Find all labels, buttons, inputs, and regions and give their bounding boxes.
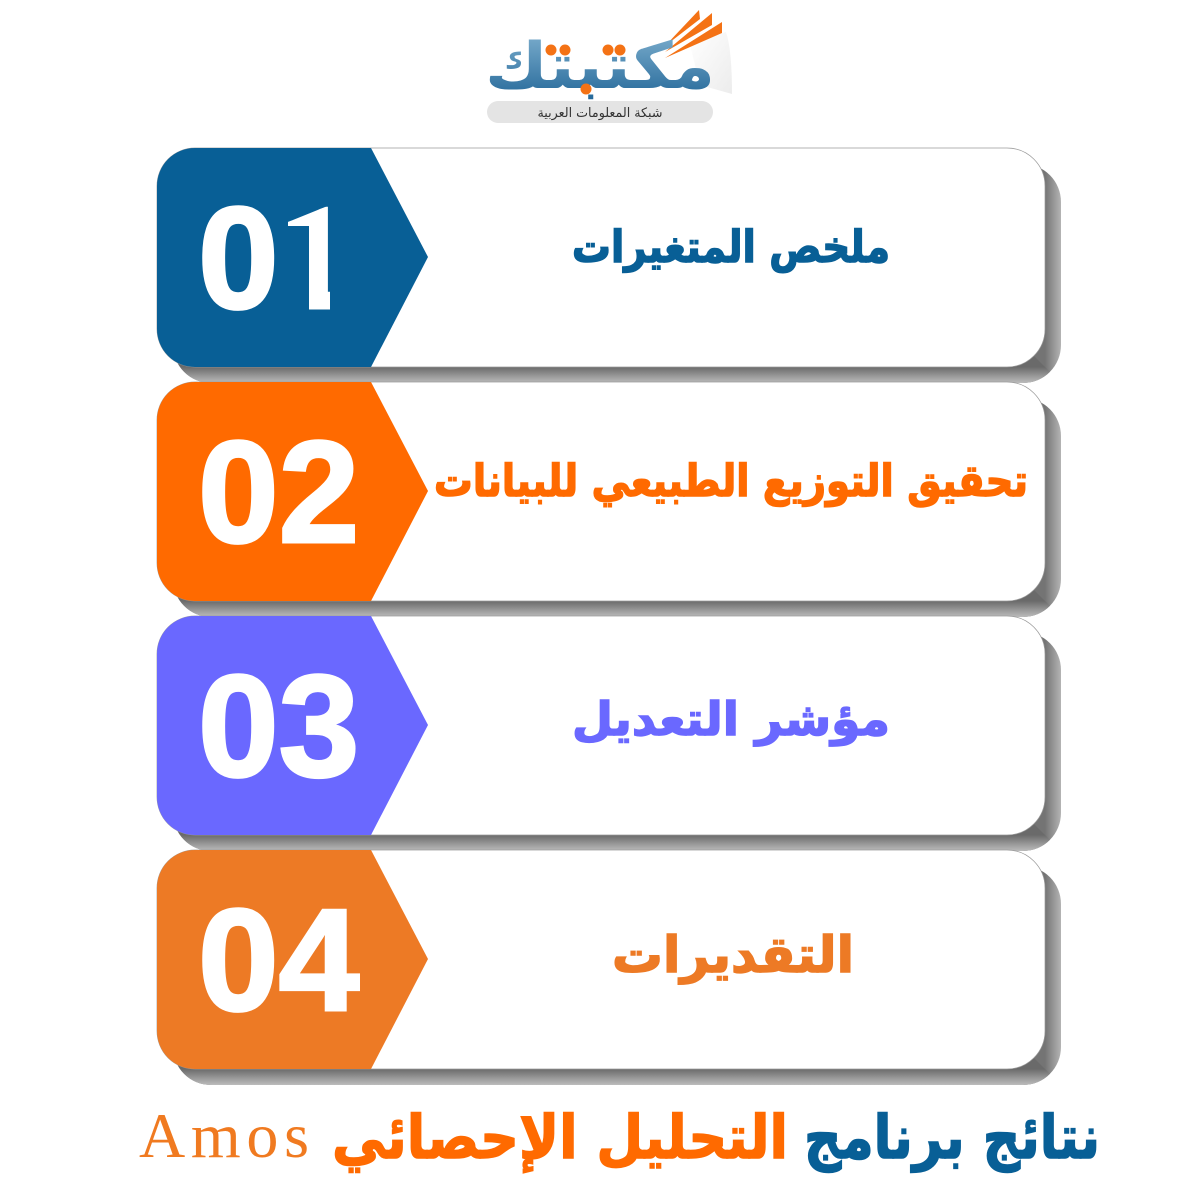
number: 03 <box>198 645 359 807</box>
logo paper corner <box>690 32 732 94</box>
logo tagline: شبكة المعلومات العربية <box>538 106 662 121</box>
card shadow <box>173 398 1061 617</box>
card body <box>157 382 1045 601</box>
logo dots <box>546 44 626 94</box>
card body <box>157 148 1045 367</box>
title <box>139 1100 1100 1173</box>
number tab <box>157 850 428 1069</box>
title: orange part: التحليل الإحصائي <box>332 1103 788 1173</box>
panel: item 01 <box>157 148 1061 383</box>
card body <box>157 616 1045 835</box>
title: Amos: Amos <box>139 1100 309 1171</box>
number tab <box>157 148 428 367</box>
card shadow <box>173 866 1061 1085</box>
card body <box>157 850 1045 1069</box>
heading: ملخص المتغيرات <box>572 222 890 273</box>
number tab <box>157 616 428 835</box>
logo orange rays <box>665 10 722 58</box>
heading: مؤشر التعديل <box>572 692 890 746</box>
number: 04 <box>198 879 359 1041</box>
heading: تحقيق التوزيع الطبيعي للبيانات <box>434 456 1028 507</box>
panel: item 02 <box>157 382 1061 617</box>
card shadow <box>173 164 1061 383</box>
logo wordmark: مكتبتك <box>485 30 715 104</box>
number: 02 <box>198 411 359 573</box>
number tab <box>157 382 428 601</box>
title: blue part: نتائج برنامج <box>804 1103 1100 1173</box>
heading: التقديرات <box>612 926 854 985</box>
number: 01 <box>198 177 353 339</box>
logo tagline pill <box>487 101 713 123</box>
logo <box>485 10 732 123</box>
card shadow <box>173 632 1061 851</box>
panel: item 03 <box>157 616 1061 851</box>
panel: item 04 <box>157 850 1061 1085</box>
